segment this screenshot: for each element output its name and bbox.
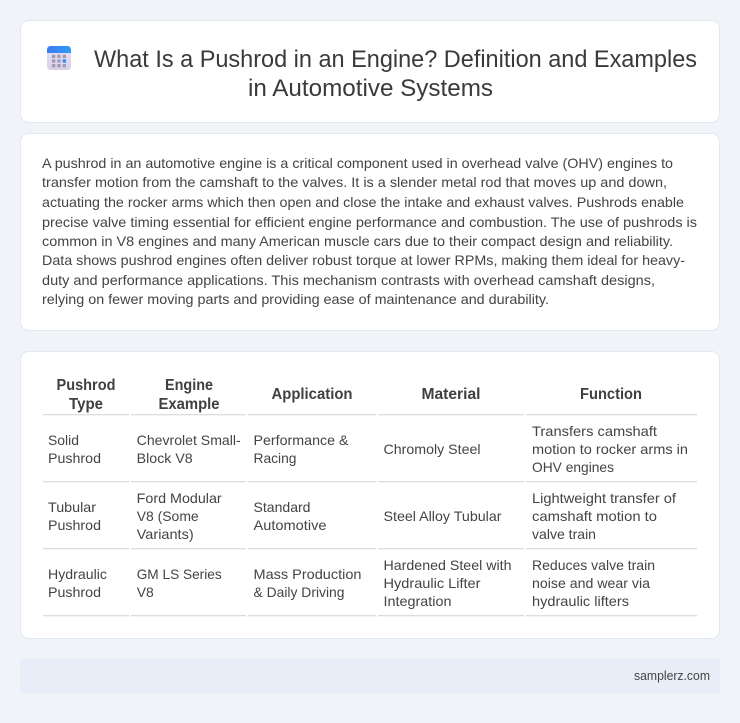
footer bbox=[20, 659, 720, 693]
table row: solid pushrod: OHV engines bbox=[532, 459, 614, 475]
table row: solid pushrod: Chevrolet Small- bbox=[137, 432, 241, 448]
panel: table card bbox=[20, 352, 720, 638]
title: in Automotive Systems bbox=[248, 75, 493, 102]
table header: Example bbox=[158, 396, 220, 413]
table row: hydraulic pushrod bbox=[48, 557, 655, 609]
table row: hydraulic pushrod: Hydraulic Lifter bbox=[384, 575, 481, 591]
table row: hydraulic pushrod: V8 bbox=[137, 584, 154, 600]
table row: tubular pushrod: Standard bbox=[254, 499, 310, 515]
text block: description paragraph: common in V8 engines and many American muscle cars due to their compact design and reliability. bbox=[42, 233, 673, 249]
table header: Pushrod bbox=[56, 377, 116, 394]
text block: description paragraph: precise valve timing essential for efficient engine performance and combustion. The use of pushrods is bbox=[42, 214, 697, 230]
table row: solid pushrod bbox=[48, 423, 688, 475]
table row: tubular pushrod: valve train bbox=[532, 526, 596, 542]
table row: solid pushrod: Chromoly Steel bbox=[384, 441, 480, 457]
text block: description paragraph: transfer motion from the camshaft to the valves. It is a slender metal rod that moves up and down, bbox=[42, 174, 667, 190]
table row: tubular pushrod: Lightweight transfer of bbox=[532, 490, 676, 506]
table row: hydraulic pushrod: Hydraulic bbox=[48, 566, 107, 582]
table header: Engine bbox=[165, 377, 213, 394]
table row: hydraulic pushrod: GM LS Series bbox=[137, 566, 222, 582]
table row: solid pushrod: Transfers camshaft bbox=[532, 423, 657, 439]
table row: tubular pushrod: Ford Modular bbox=[137, 490, 222, 506]
table row: solid pushrod: Pushrod bbox=[48, 450, 101, 466]
table row: tubular pushrod: Variants) bbox=[137, 526, 194, 542]
table row: solid pushrod: Block V8 bbox=[137, 450, 193, 466]
panel: title card bbox=[20, 20, 720, 122]
table row: hydraulic pushrod: hydraulic lifters bbox=[532, 593, 629, 609]
text block: description paragraph: actuating the rocker arms which then open and close the intake and exhaust valves. Pushrods enable bbox=[42, 194, 684, 210]
table row: hydraulic pushrod: Reduces valve train bbox=[532, 557, 655, 573]
table row: solid pushrod: Racing bbox=[254, 450, 296, 466]
table row: tubular pushrod: Pushrod bbox=[48, 517, 101, 533]
footer: samplerz.com bbox=[634, 669, 710, 683]
table row: tubular pushrod: Automotive bbox=[254, 517, 327, 533]
table row: solid pushrod: motion to rocker arms in bbox=[532, 441, 688, 457]
text block: description paragraph: duty and performance applications. This mechanism contrasts with overhead camshaft designs, bbox=[42, 272, 655, 288]
text block: description paragraph: A pushrod in an automotive engine is a critical component used in overhead valve (OHV) engines to bbox=[42, 155, 673, 171]
table row: hydraulic pushrod: & Daily Driving bbox=[254, 584, 344, 600]
text block: description paragraph: relying on fewer moving parts and providing ease of maintenance and durability. bbox=[42, 291, 549, 307]
title: What Is a Pushrod in an Engine? Definition and Examples bbox=[94, 46, 697, 73]
table row: tubular pushrod: camshaft motion to bbox=[532, 508, 657, 524]
table row: tubular pushrod: Tubular bbox=[48, 499, 96, 515]
table row: hydraulic pushrod: Hardened Steel with bbox=[384, 557, 512, 573]
table header: Type bbox=[69, 396, 103, 413]
table header: Function bbox=[580, 386, 642, 403]
table row: hydraulic pushrod: Integration bbox=[384, 593, 452, 609]
text block: description paragraph bbox=[42, 155, 697, 307]
panel: description bbox=[20, 134, 720, 330]
table row: hydraulic pushrod: noise and wear via bbox=[532, 575, 650, 591]
table header bbox=[56, 377, 642, 413]
table row: solid pushrod: Solid bbox=[48, 432, 79, 448]
table row: tubular pushrod: Steel Alloy Tubular bbox=[384, 508, 502, 524]
table row: solid pushrod: Performance & bbox=[254, 432, 349, 448]
table row: hydraulic pushrod: Pushrod bbox=[48, 584, 101, 600]
table row: hydraulic pushrod: Mass Production bbox=[254, 566, 362, 582]
text block: description paragraph: Data shows pushrod engines often deliver robust torque at lower RPMs, making them ideal for heavy- bbox=[42, 252, 685, 268]
table header: Material bbox=[422, 386, 480, 403]
table header: Application bbox=[272, 386, 352, 403]
table row: tubular pushrod bbox=[48, 490, 676, 542]
table row: tubular pushrod: V8 (Some bbox=[137, 508, 199, 524]
title bbox=[94, 46, 697, 102]
icon: calendar bbox=[47, 46, 71, 70]
